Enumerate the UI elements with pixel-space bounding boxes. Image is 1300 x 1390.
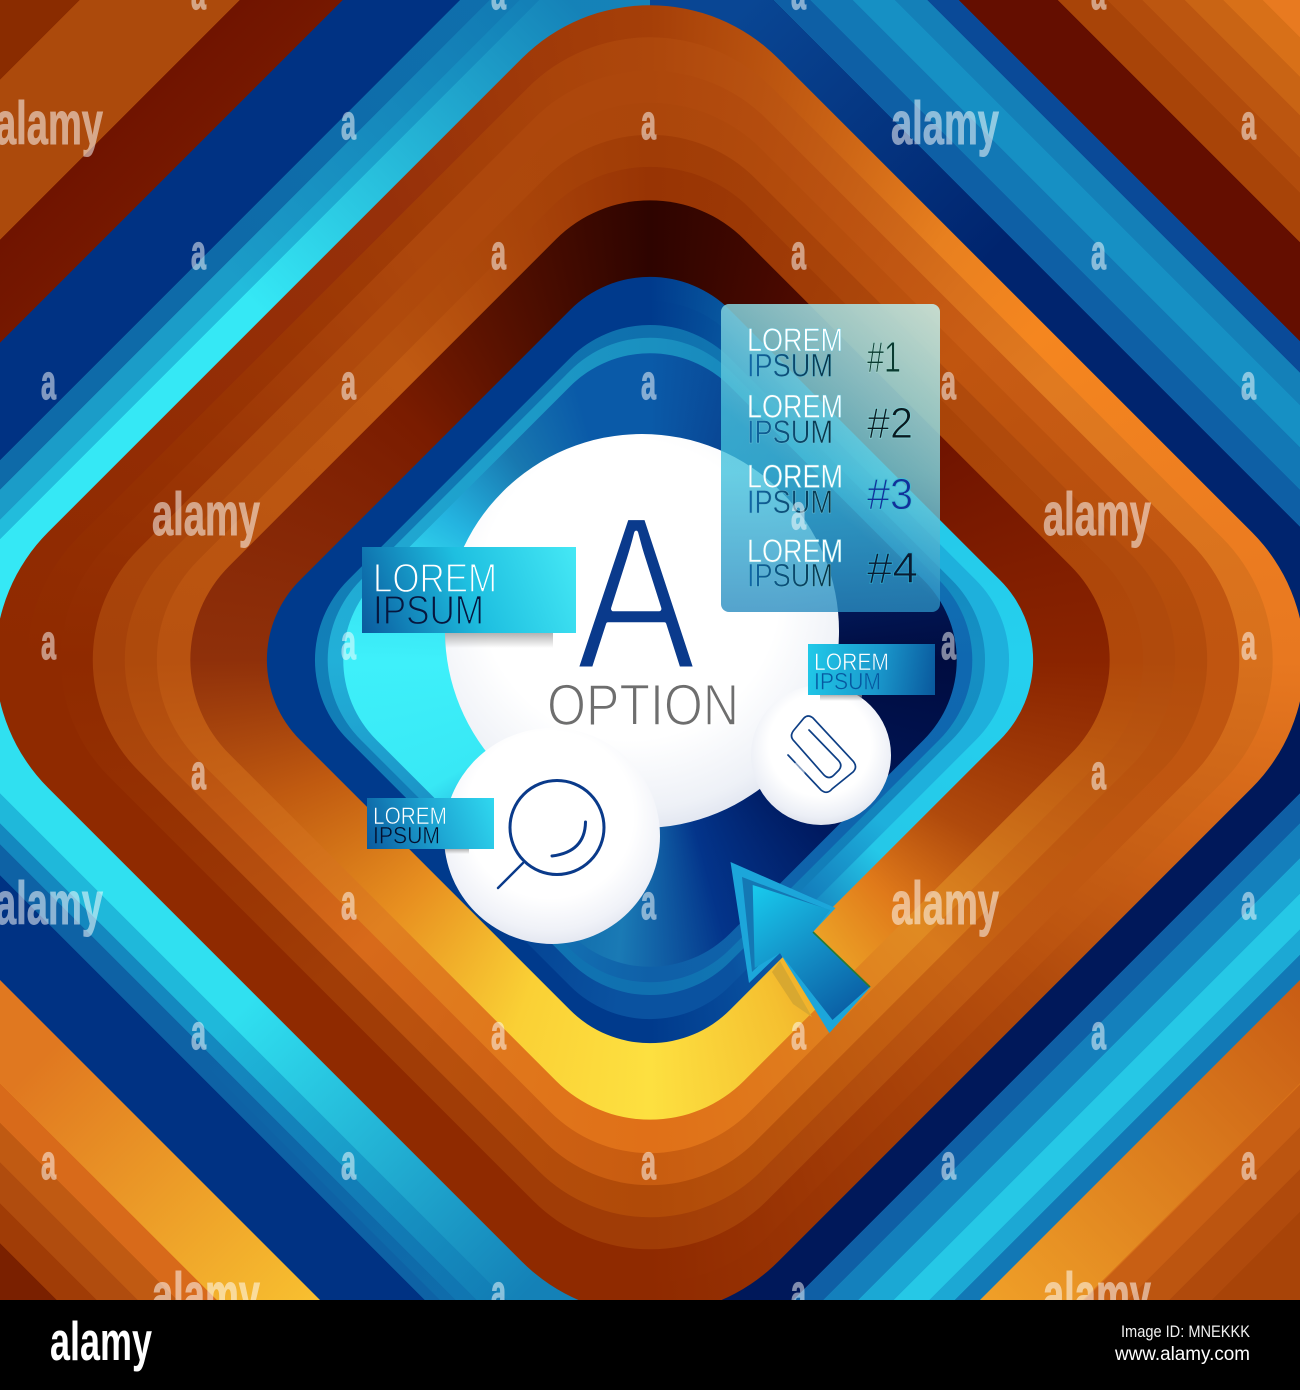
list item 3: IPSUM (747, 484, 833, 520)
circle: main white (445, 434, 839, 828)
centre panel: deep blue to cyan (296, 306, 1004, 1014)
icon: paperclip (788, 716, 856, 792)
icon: cursor arrow (730, 862, 871, 1033)
label: magnifier lorem ipsum: IPSUM (373, 822, 440, 850)
watermark: alamy repeats: alamy (891, 870, 999, 937)
list item 1 (747, 322, 901, 384)
ring: blue band outer (220, 230, 1080, 1090)
list item 3: #3 (867, 470, 913, 519)
watermark: alamy repeats: alamy (152, 481, 260, 548)
ring: dark-to-yellow band (135, 145, 1165, 1175)
list item 1: #1 (867, 333, 901, 382)
list item 3 (747, 458, 913, 520)
list item 2: LOREM (747, 388, 843, 424)
watermark: small letter grid: aaa (341, 876, 1257, 930)
label: small right lorem ipsum: IPSUM (814, 668, 881, 696)
label: magnifier lorem ipsum: LOREM (373, 803, 447, 830)
icon: magnifier (498, 780, 604, 888)
watermark: small letter grid: aaaa (191, 746, 1107, 800)
list item 3: LOREM (747, 458, 843, 494)
label: large lorem ipsum: LOREM (373, 555, 497, 601)
label: small right lorem ipsum (808, 644, 935, 701)
footer text: image id: Image ID: MNEKKK (1121, 1322, 1251, 1341)
label: large lorem ipsum: IPSUM (373, 587, 484, 633)
list item 1: IPSUM (747, 348, 833, 384)
ring: blue band second (244, 254, 1056, 1066)
watermark: small letter grid: aaaaa (41, 616, 1257, 670)
watermark: small letter grid: aaaa (191, 1006, 1107, 1060)
list item 4 (747, 533, 918, 594)
watermark: alamy repeats: alamy (0, 90, 103, 157)
list item 2: #2 (867, 399, 913, 448)
word OPTION: OPTION (547, 673, 739, 738)
list item 4: LOREM (747, 533, 843, 569)
list item 2: IPSUM (747, 414, 833, 450)
list item 2 (747, 388, 913, 450)
ring: fifth orange band (63, 73, 1237, 1247)
footer: black credit bar (50, 1310, 1251, 1372)
list item 1: LOREM (747, 322, 843, 358)
watermark: small letter grid: aaaaa (41, 356, 1257, 410)
watermark: small letter grid: aaaa (191, 226, 1107, 280)
label: magnifier lorem ipsum (367, 798, 494, 854)
watermark: small letter grid: aaaaa (41, 1136, 1257, 1190)
footer text: website: www.alamy.com (1114, 1344, 1250, 1365)
watermark: alamy repeats: alamy (891, 90, 999, 157)
list item 4: IPSUM (747, 558, 833, 594)
panel: translucent list (721, 304, 940, 612)
watermark: small letter grid: aaa (341, 96, 1257, 150)
ring: blue band third (268, 278, 1032, 1042)
label: large lorem ipsum (362, 547, 576, 648)
list item 4: #4 (867, 544, 918, 593)
watermark: small letter grid: aa (491, 486, 807, 540)
circle: paperclip (751, 685, 891, 825)
big letter A: A (576, 470, 696, 716)
watermark: alamy repeats: alamy (0, 870, 103, 937)
watermark: alamy repeats (0, 90, 1151, 1328)
ring: sixth orange band (98, 108, 1202, 1212)
ring: blue band fourth (281, 291, 1019, 1029)
watermark: alamy repeats: alamy (1043, 481, 1151, 548)
circle: magnifier (444, 728, 660, 944)
label: small right lorem ipsum: LOREM (814, 649, 889, 676)
footer logo: alamy: alamy (50, 1310, 152, 1372)
